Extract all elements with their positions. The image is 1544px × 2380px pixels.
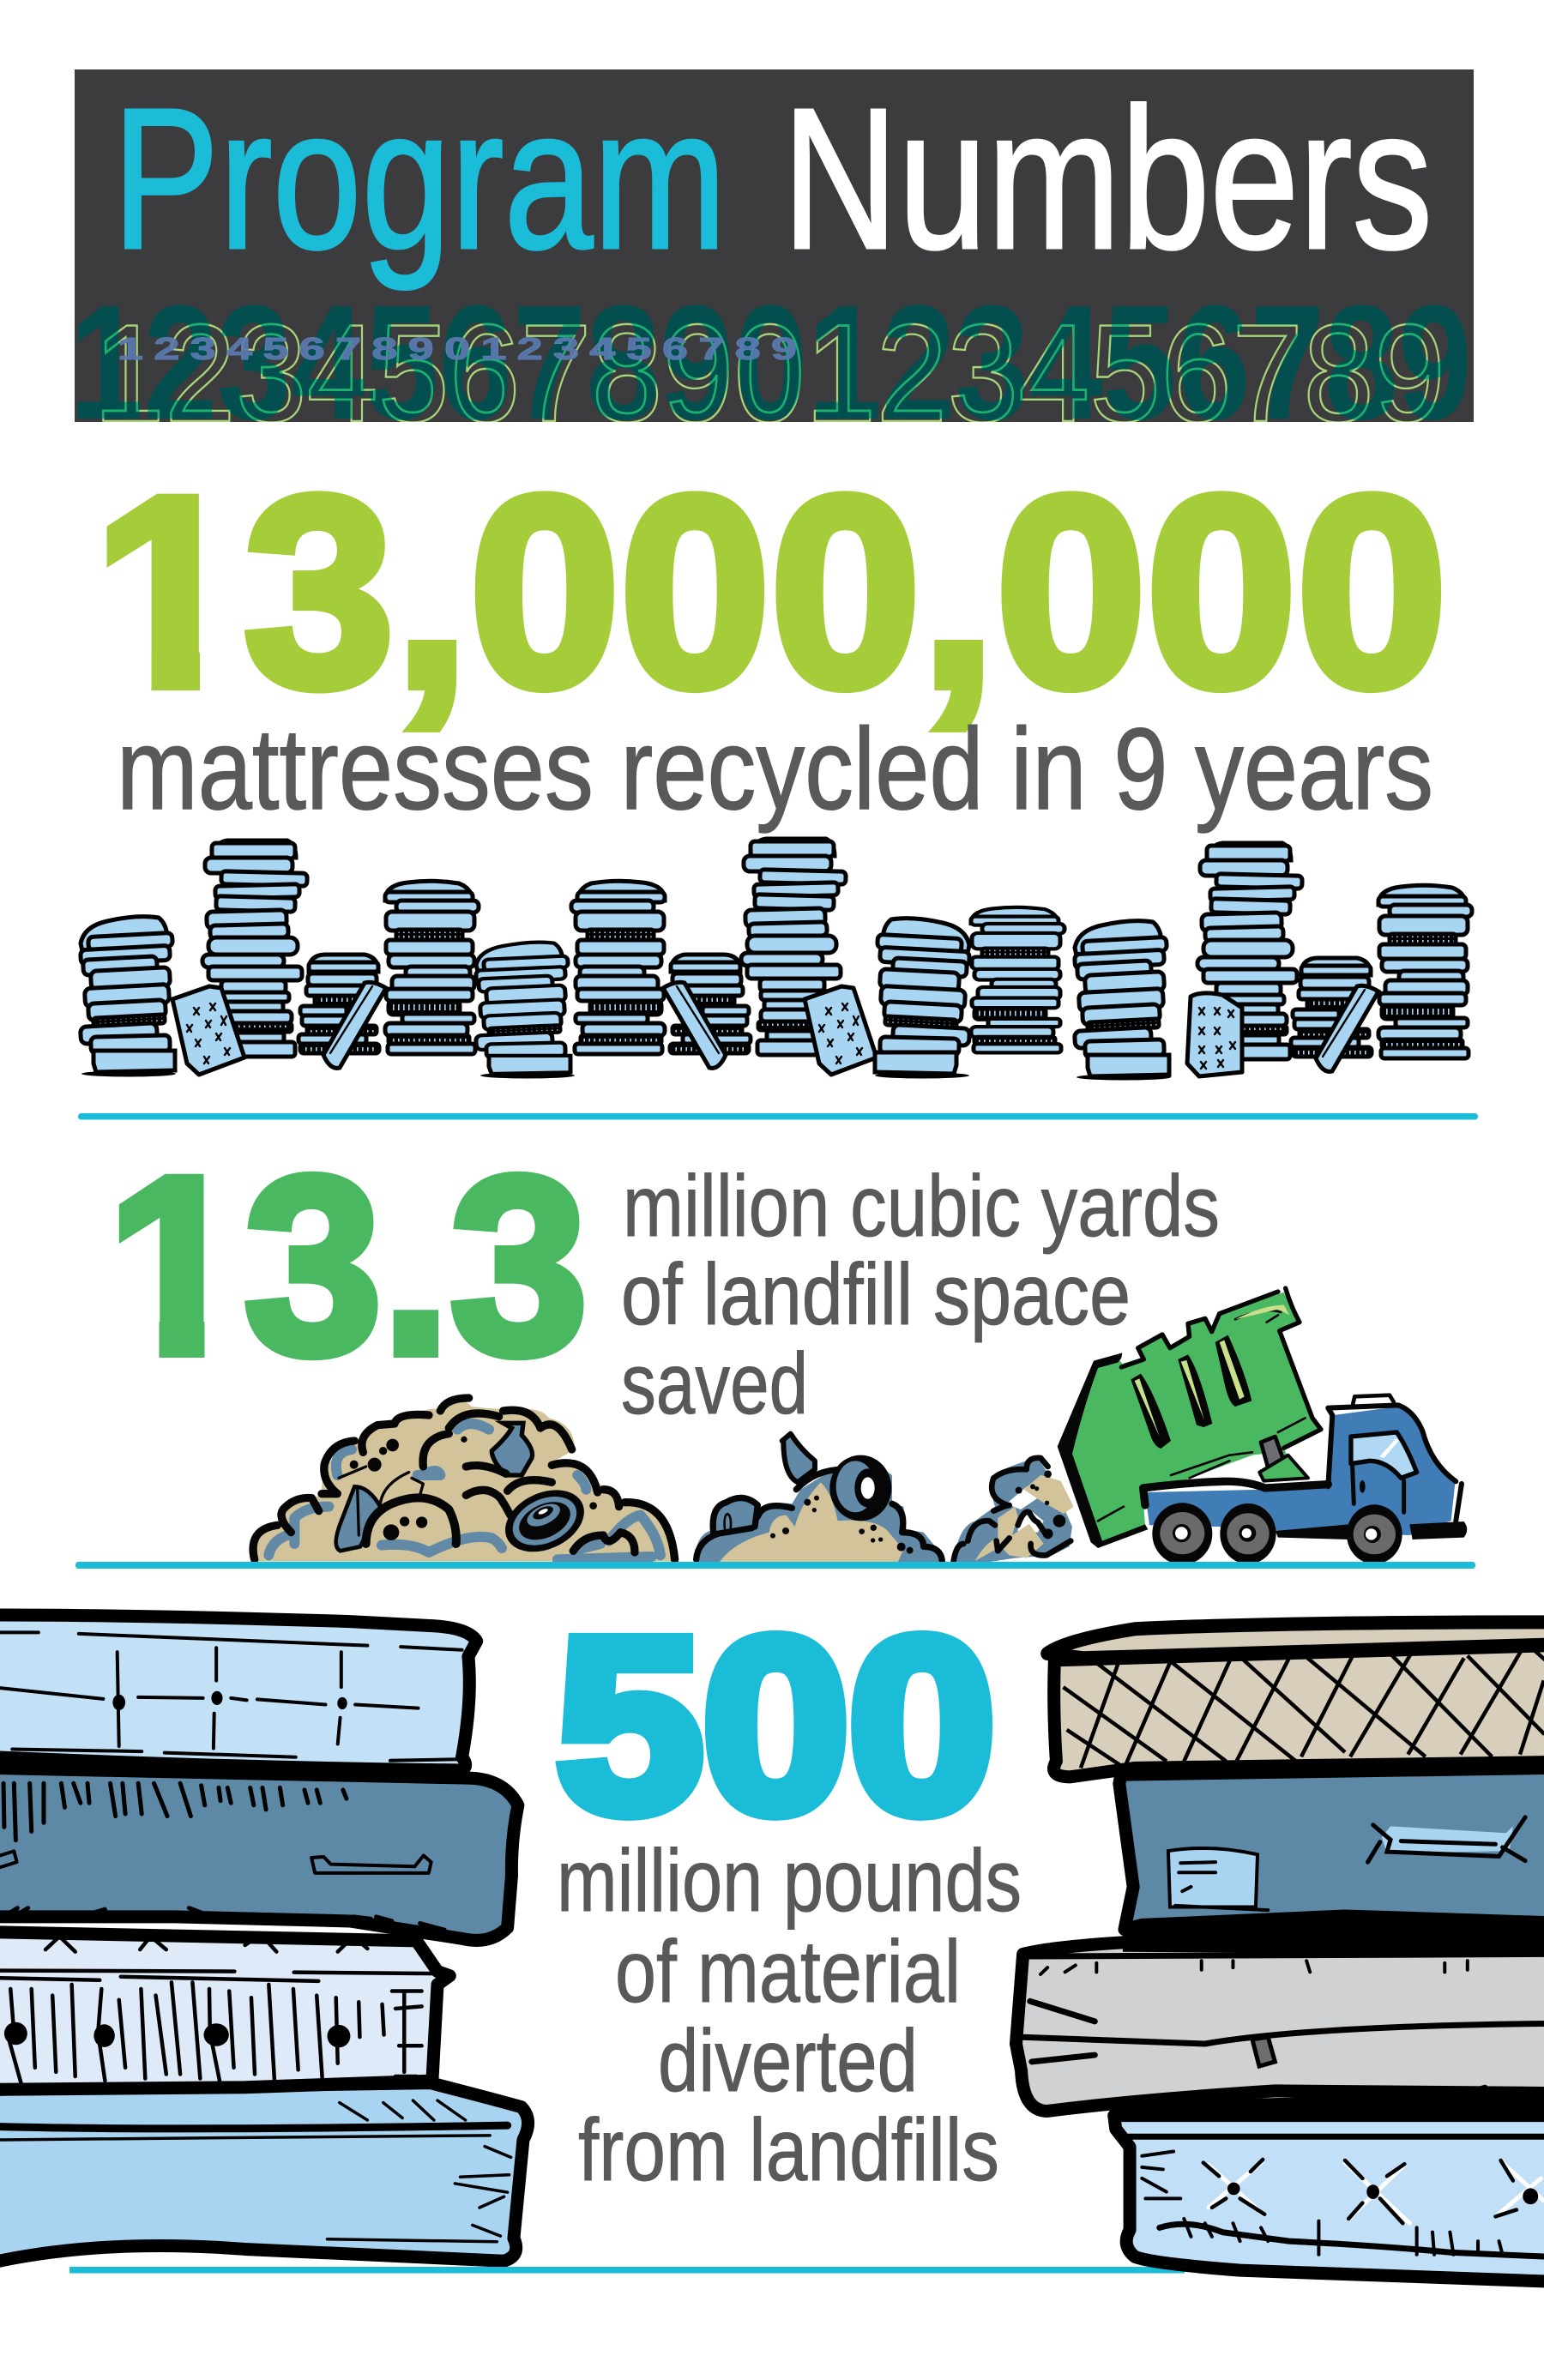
dumper: [1064, 1292, 1321, 1544]
illustration: garbage truck: [1058, 1288, 1467, 1564]
caption: million pounds diverted: [557, 1831, 1022, 2199]
hydraulic piston: [1261, 1437, 1284, 1468]
divider 2: [75, 1562, 1475, 1569]
mattress: blue bottom: [0, 2083, 528, 2263]
caption: million pounds diverted: of material: [615, 1922, 961, 2021]
mattress: light blue top: [0, 1615, 477, 1770]
illustration: small landfill pile: [954, 1458, 1074, 1563]
illustration: right stack of large mattresses: [1016, 1622, 1544, 2281]
decorative digit band: 1234567890123456789: [93, 296, 1445, 451]
truck window: [1351, 1432, 1417, 1478]
stat: 13,000,000: 13,000,000: [93, 440, 1447, 743]
title: Program: Program: [112, 66, 727, 291]
illustration: row of mattress stacks: [81, 839, 1472, 1081]
illustration: left stack of large mattresses: [0, 1615, 528, 2263]
stat: 500: 500: [557, 1588, 995, 1864]
decorative digit band: 1234567890123456789: [93, 296, 1445, 451]
caption: million pounds diverted: diverted: [658, 2011, 918, 2110]
truck outlines: [1143, 1481, 1328, 1505]
caption: cubic yards saved: saved: [621, 1336, 808, 1432]
dumper slots: [1131, 1374, 1171, 1449]
caption: million pounds diverted: million pounds: [557, 1831, 1022, 1930]
caption: cubic yards saved: million cubic yards: [623, 1159, 1220, 1255]
bottle: [492, 1423, 533, 1475]
mattress: dark with label and handle: [1119, 1768, 1544, 1930]
caption: cubic yards saved: [621, 1159, 1220, 1432]
stat: 13.3: 13.3: [107, 1125, 588, 1407]
caption: cubic yards saved: of landfill space: [621, 1247, 1131, 1343]
trash bag: [336, 1486, 380, 1551]
caption: million pounds diverted: from landfills: [578, 2100, 999, 2199]
mattress: pale tufted: [0, 1932, 449, 2089]
mattress: dark with handle: [0, 1768, 518, 1940]
illustration: large landfill pile: [251, 1398, 675, 1564]
divider 3: [69, 2267, 1185, 2273]
divider 1: [78, 1113, 1478, 1120]
tire: [495, 1478, 594, 1564]
illustration: medium landfill pile with tire: [695, 1434, 944, 1563]
mattress: grey: [1016, 1934, 1544, 2111]
mattress: bottom tufted: [1114, 2116, 1544, 2281]
wheels: [1152, 1503, 1402, 1564]
decorative digit band: 1234567890123456789: [118, 331, 797, 366]
title banner: [69, 66, 1474, 454]
mattress: tan lattice top: [1047, 1622, 1544, 1658]
truck body: [1145, 1407, 1456, 1535]
